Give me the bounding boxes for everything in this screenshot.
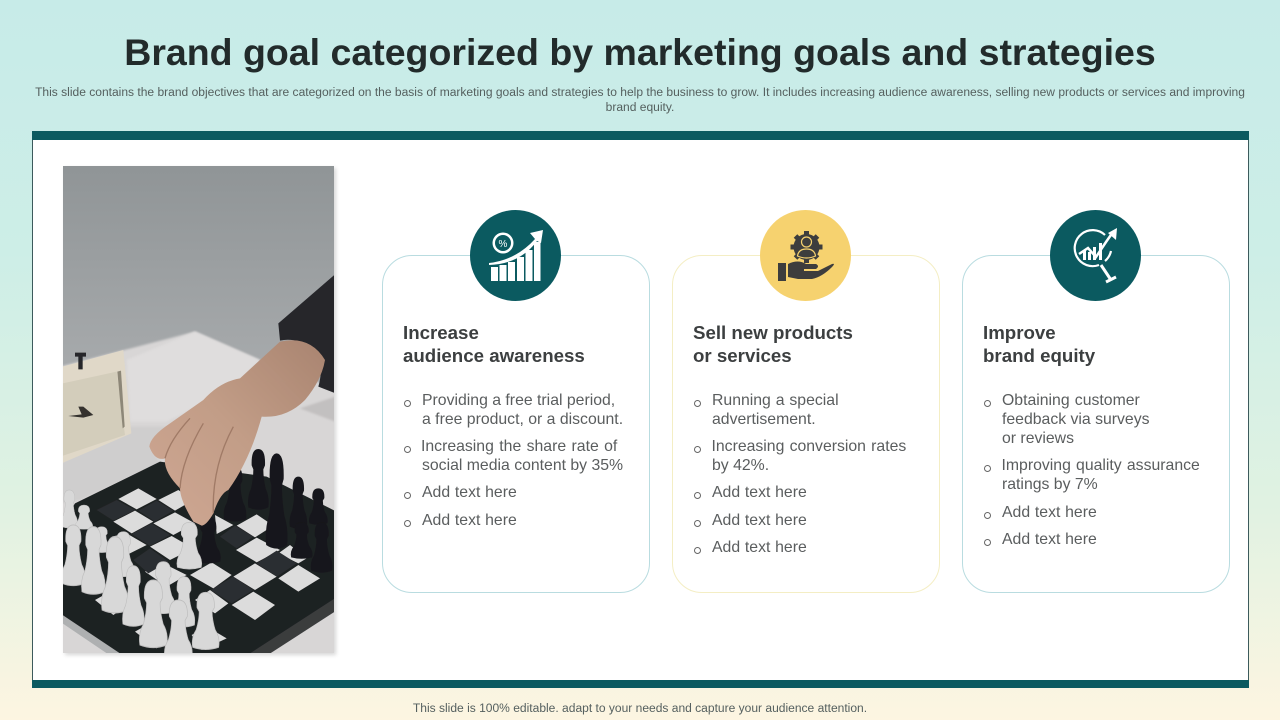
clock	[60, 350, 131, 464]
card 1 bullets: a free product, or a discount.	[422, 410, 623, 428]
footer text: This slide is 100% editable. adapt to your needs and capture your audience attention.	[413, 701, 867, 715]
card 3 bullets: ratings by 7%	[1002, 476, 1098, 492]
card 3 heading	[983, 322, 1095, 366]
card 1 bullets	[404, 392, 623, 528]
card 3 bullets: Add text here	[1002, 530, 1097, 548]
card 2 bullets	[694, 392, 906, 556]
card 3 bullets: Add text here	[1002, 504, 1097, 520]
hand	[149, 340, 325, 526]
card 1 heading	[403, 322, 585, 366]
icon: growth chart with percent badge	[470, 210, 561, 301]
card 3 bullets	[984, 392, 1200, 548]
card 3 bullets: feedback via surveys	[1002, 410, 1150, 428]
white pieces	[61, 490, 219, 661]
card 1 outline	[382, 255, 650, 593]
black pieces	[196, 449, 333, 573]
icon: magnifier with chart and arrow	[1050, 210, 1141, 301]
card 2 bullets: by 42%.	[712, 456, 769, 474]
panel top bar	[32, 131, 1249, 140]
card 2 bullets: Add text here	[712, 512, 807, 528]
squares	[95, 488, 320, 650]
card 1 bullets: Add text here	[422, 512, 517, 528]
card 1 bullets: Add text here	[422, 484, 517, 500]
card 1 bullets: social media content by 35%	[422, 456, 623, 474]
card 1 heading: audience awareness	[403, 345, 585, 366]
card 2 heading	[693, 322, 853, 366]
card 3 heading: brand equity	[983, 345, 1095, 366]
panel bottom bar	[32, 680, 1249, 688]
card 2 bullets: Increasing conversion rates	[712, 438, 906, 454]
card 2 bullets: Add text here	[712, 538, 807, 556]
subtitle text	[35, 85, 1245, 114]
sleeve	[278, 270, 340, 395]
card 3 bullets: Obtaining customer	[1002, 392, 1140, 408]
card 2 text	[693, 322, 906, 556]
title: Brand goal categorized by marketing goals and strategies	[124, 31, 1156, 73]
card 1 bullets: Providing a free trial period,	[422, 392, 615, 408]
card 3 bullets: Improving quality assurance	[1002, 456, 1200, 474]
card 3 outline	[962, 255, 1230, 593]
board	[60, 462, 340, 660]
icon: growth chart with percent badge: %	[499, 239, 508, 250]
card 2 heading: or services	[693, 345, 792, 366]
card 2 bullets: Add text here	[712, 484, 807, 500]
subtitle text: brand equity.	[606, 100, 674, 114]
card 1 bullets: Increasing the share rate of	[421, 438, 617, 454]
card 2 outline	[672, 255, 940, 593]
black squares highlight	[97, 500, 297, 603]
card 2 heading: Sell new products	[693, 322, 853, 343]
icon: hand holding gear with person	[760, 210, 851, 301]
card 3 bullets: or reviews	[1002, 430, 1074, 446]
table	[60, 332, 340, 660]
card 2 bullets: Running a special	[712, 392, 839, 408]
card 1 heading: Increase	[403, 322, 479, 343]
card 3 heading: Improve	[983, 322, 1056, 343]
card 2 bullets: advertisement.	[712, 410, 816, 428]
photo: hand moving a chess piece	[63, 166, 334, 653]
subtitle text: This slide contains the brand objectives that are categorized on the basis of marketing goals and strategies to help the business to grow. It includes increasing audience awareness, selling new products or services and improving	[35, 85, 1245, 99]
card 3 text	[983, 322, 1200, 548]
card 1 text	[403, 322, 623, 528]
main panel	[32, 131, 1249, 688]
